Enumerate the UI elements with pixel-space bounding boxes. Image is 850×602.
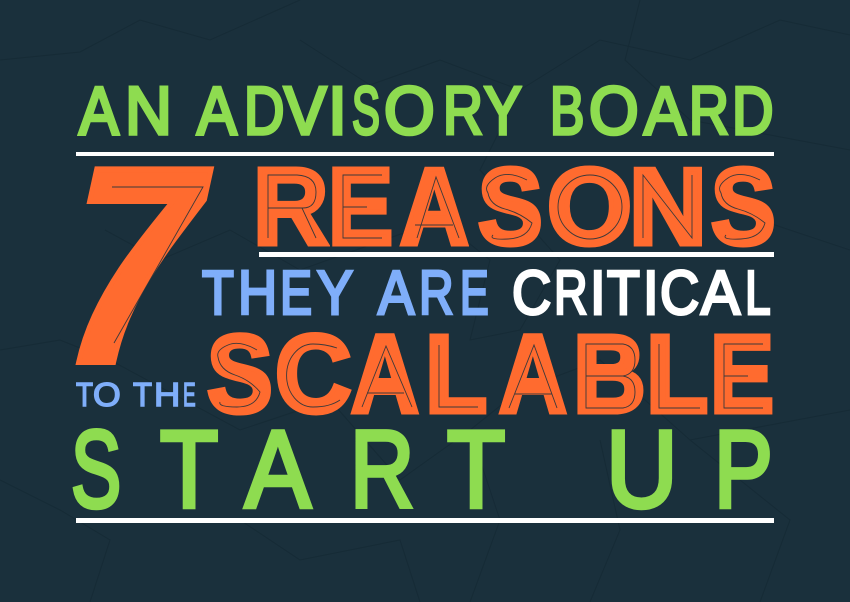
word: Critical: C [660,258,699,328]
heading line: An Advisory Board: O [384,74,434,149]
word: Scalable: C [275,313,352,436]
rule under heading [76,152,774,156]
line: To the: T [76,377,93,414]
word: Scalable: B [573,313,646,436]
line: They are: E [460,258,488,328]
word: Critical: R [554,258,588,328]
heading line: An Advisory Board: S [352,74,380,149]
numeral 7: 7 [31,110,235,422]
word: Reasons: R [253,146,328,268]
line: They are: H [238,258,277,328]
line: Start up: A [245,409,311,531]
word: Reasons: N [629,146,707,268]
line: To the: T [133,377,152,414]
heading line: An Advisory Board: I [328,74,347,149]
line: To the: O [93,377,121,414]
line: To the: H [154,377,180,414]
word: Scalable: E [710,313,774,436]
heading line: An Advisory Board: D [244,74,285,149]
heading line: An Advisory Board: A [644,74,685,149]
line: They are: Y [317,258,353,328]
line: To the: E [183,377,196,414]
line: Start up: T [160,409,218,531]
heading line: An Advisory Board: A [197,74,236,149]
line: Start up: P [714,409,773,531]
word: Scalable: A [351,313,419,436]
line: Start up: R [350,409,414,531]
word: Scalable: S [207,313,272,436]
word: Critical: A [701,258,740,328]
heading line: An Advisory Board: R [689,74,729,149]
word: Scalable: L [425,313,487,436]
word: Reasons: S [478,146,542,268]
heading line: An Advisory Board: A [79,74,118,149]
line: Start up: S [71,409,121,531]
word: Critical: I [590,258,606,328]
word: Scalable: L [646,313,708,436]
line: They are: E [280,258,312,328]
heading line: An Advisory Board: Y [484,74,522,149]
line: They are: T [202,258,234,328]
line: They are: R [419,258,454,328]
heading line: An Advisory Board: D [732,74,774,149]
heading line: An Advisory Board: O [589,74,638,149]
heading line: An Advisory Board: R [443,74,483,149]
line: Start up: U [606,409,678,531]
word: Reasons: A [400,146,469,268]
heading line: An Advisory Board: V [284,74,327,149]
word: Reasons: S [711,146,775,268]
word: Scalable: A [499,313,567,436]
word: Critical: T [607,258,640,328]
word: Reasons: E [328,146,393,268]
word: Critical: C [512,258,551,328]
word: Reasons: O [547,146,632,268]
heading line: An Advisory Board: B [550,74,584,149]
bottom rule [76,518,774,523]
heading line: An Advisory Board: N [125,74,172,149]
word: Critical: L [745,258,770,328]
word: Critical: I [643,258,659,328]
line: Start up: T [447,409,505,531]
line: They are: A [378,258,415,328]
rule under Reasons [259,252,774,257]
